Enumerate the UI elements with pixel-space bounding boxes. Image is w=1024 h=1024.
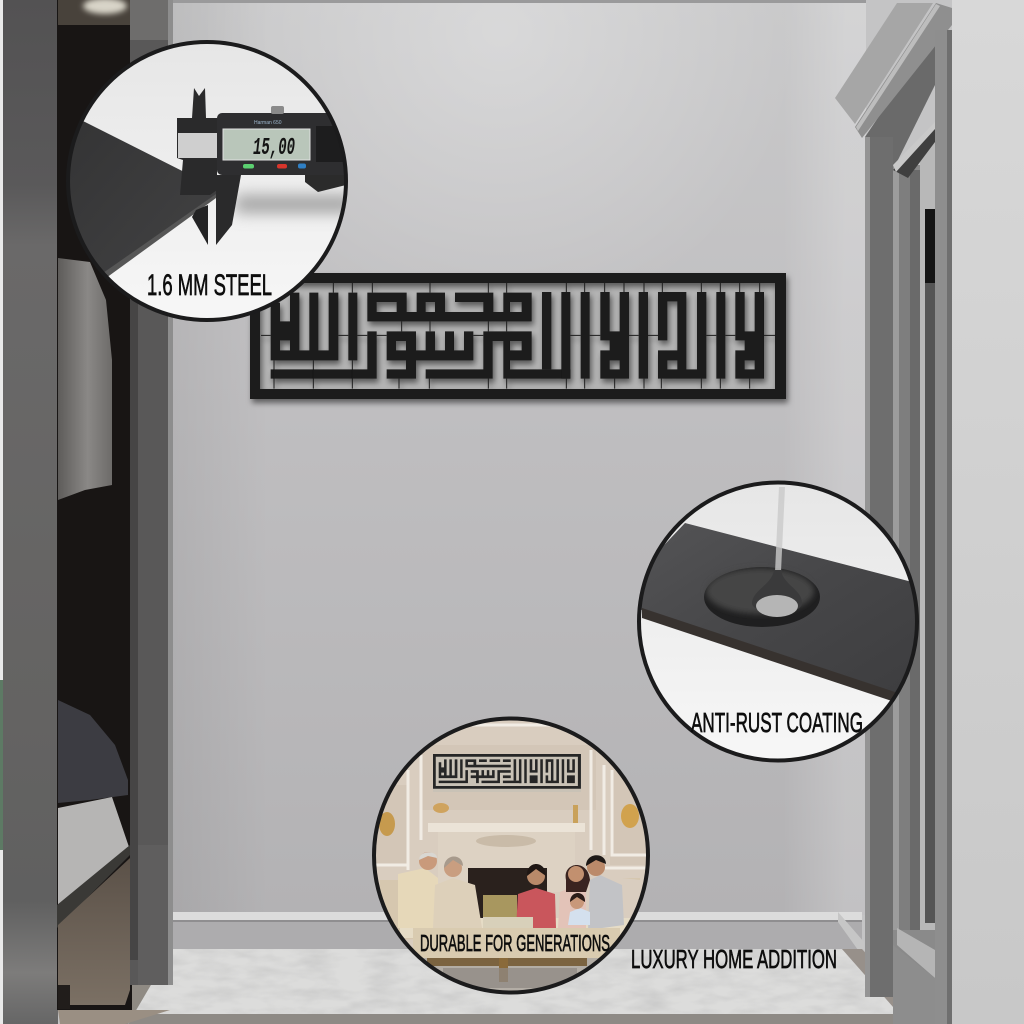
hanging garment — [58, 258, 112, 500]
label: luxury home addition: LUXURY HOME ADDITION — [631, 944, 837, 974]
caliper jaws — [177, 88, 217, 195]
caliper body — [217, 113, 352, 175]
kufic calligraphy wall panel — [250, 273, 786, 399]
callout circle: 1.6 mm steel caliper: Harman 650 — [254, 120, 282, 126]
miniature calligraphy panel — [433, 754, 581, 792]
label: 1.6 mm steel: 1.6 MM STEEL — [147, 269, 272, 302]
caliper buttons — [243, 164, 254, 168]
marble floor — [60, 949, 930, 1024]
family figures — [398, 852, 624, 930]
right door and window — [835, 0, 1024, 1024]
sofa — [380, 878, 640, 940]
lower drawer — [58, 858, 130, 1005]
baseboard — [172, 912, 864, 975]
black plate — [636, 523, 920, 700]
water stream and droplet — [775, 487, 785, 572]
white cushion — [58, 797, 130, 905]
LCD display — [223, 129, 310, 160]
callout circle: durable for generations family — [370, 715, 655, 1000]
callout circle: 1.6 mm steel caliper — [60, 40, 355, 325]
label: anti-rust coating: ANTI-RUST COATING — [691, 707, 863, 738]
steel plate — [70, 122, 216, 272]
callout circle: 1.6 mm steel caliper: 15,00 — [253, 135, 295, 162]
label: durable for generations: DURABLE FOR GENERATIONS — [420, 930, 610, 956]
coffee table — [413, 917, 620, 988]
folded bag — [58, 700, 128, 803]
callout circle: anti-rust coating — [635, 480, 925, 765]
mantel and fireplace — [379, 803, 639, 922]
coating puddle — [704, 567, 820, 627]
left closet — [0, 0, 173, 1024]
